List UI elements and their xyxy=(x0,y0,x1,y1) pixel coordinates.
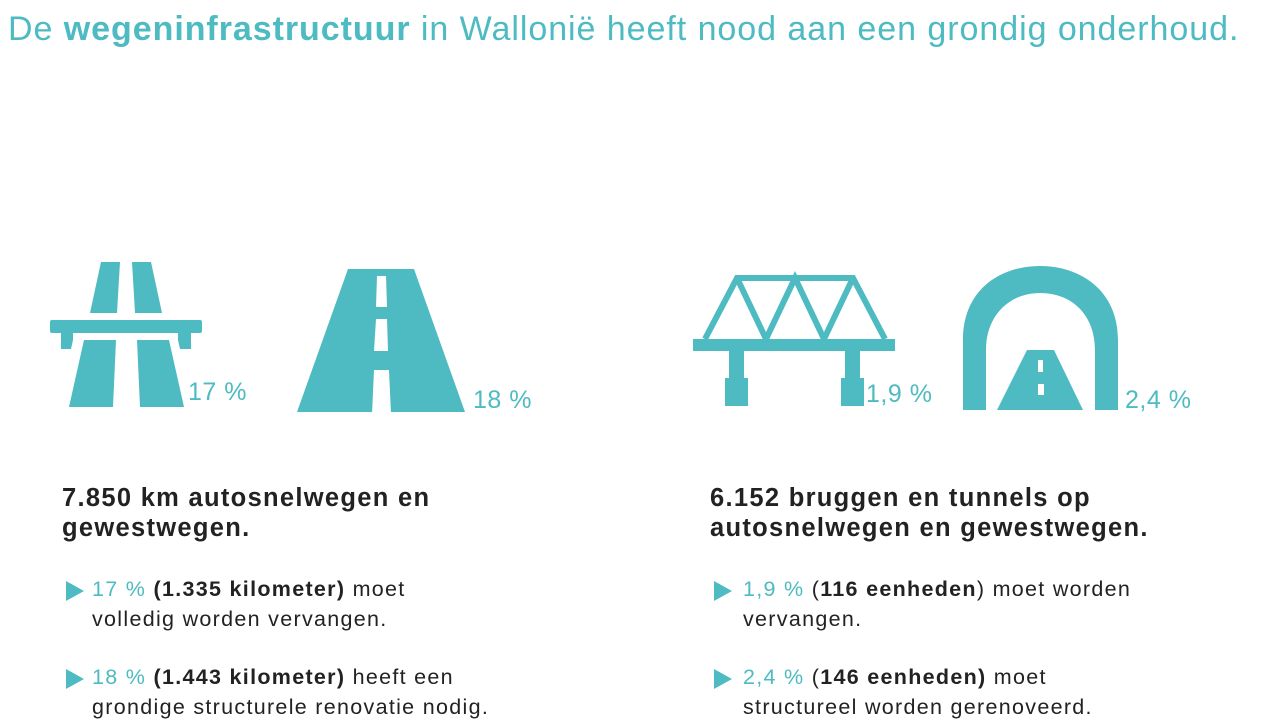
label: 17%: 17 % xyxy=(188,378,247,406)
icon: motorway xyxy=(50,262,202,407)
heading: bridges xyxy=(710,484,1149,542)
label: 2,4%: 2,4 % xyxy=(1125,386,1191,414)
bullet 3: vervangen. xyxy=(743,607,862,631)
icons xyxy=(50,262,1118,412)
panel: bridges text xyxy=(710,484,1149,719)
bullet 3: 1,9 % (116 eenheden) moet worden xyxy=(743,577,1131,601)
bullet 2: grondige structurele renovatie nodig. xyxy=(92,695,489,719)
heading: bridges: 6.152 bruggen en tunnels op xyxy=(710,484,1091,512)
label: 1,9%: 1,9 % xyxy=(866,380,932,408)
bullet 4: structureel worden gerenoveerd. xyxy=(743,695,1093,719)
bullet 2: 18 % (1.443 kilometer) heeft een xyxy=(92,665,454,689)
bullet 1: 17 % (1.335 kilometer) moet xyxy=(92,577,406,601)
icon: bridge xyxy=(693,278,895,406)
bullet 4: 2,4 % (146 eenheden) moet xyxy=(743,665,1047,689)
heading: roads: gewestwegen. xyxy=(62,514,250,542)
icon: road xyxy=(297,269,465,414)
bullet 1 xyxy=(66,577,406,631)
bullet 1: volledig worden vervangen. xyxy=(92,607,388,631)
bullet 4 xyxy=(714,665,1093,719)
heading: bridges: autosnelwegen en gewestwegen. xyxy=(710,514,1149,542)
bullet 3 xyxy=(714,577,1131,631)
heading: roads xyxy=(62,484,430,542)
label: 18%: 18 % xyxy=(473,386,532,414)
heading: roads: 7.850 km autosnelwegen en xyxy=(62,484,430,512)
panel: roads text xyxy=(62,484,489,719)
bullet 2 xyxy=(66,665,489,719)
icon: tunnel xyxy=(963,266,1118,410)
title: De wegeninfrastructuur in Wallonië heeft nood aan een grondig onderhoud. xyxy=(8,10,1239,48)
